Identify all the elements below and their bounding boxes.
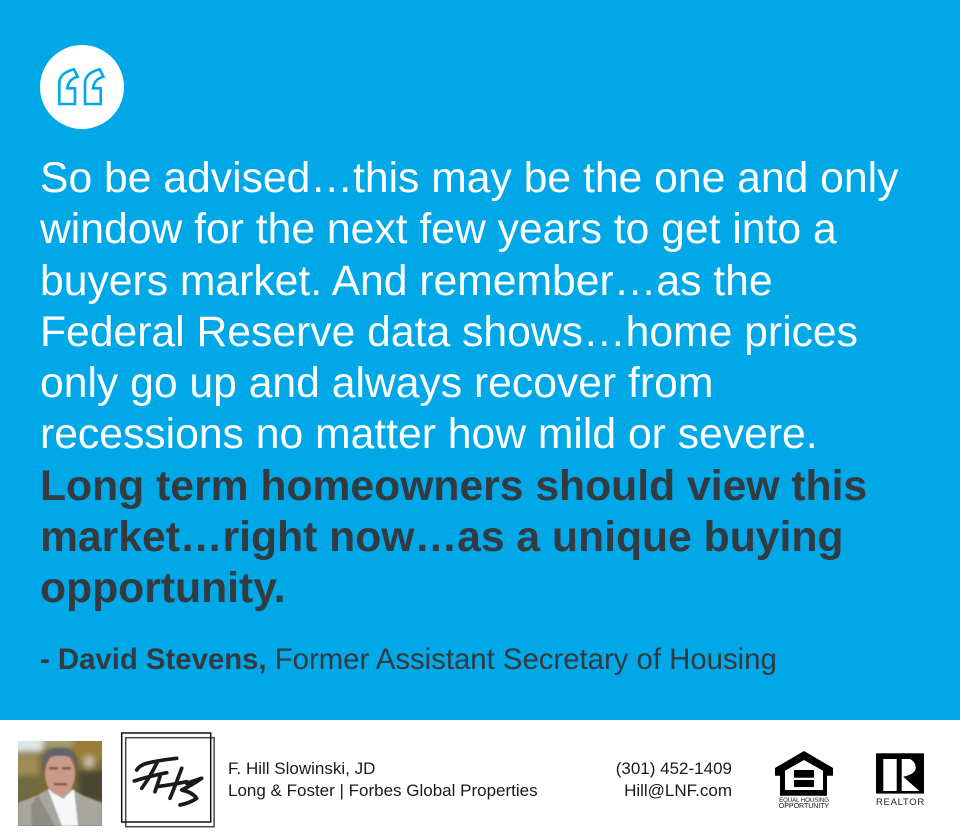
icon: quotation mark badge xyxy=(40,45,124,129)
panel: contact footer xyxy=(18,732,924,828)
quote text: opportunity. xyxy=(40,564,286,612)
agent name and company: Long & Foster | Forbes Global Properties xyxy=(228,781,538,800)
icon: equal housing opportunity: OPPORTUNITY xyxy=(779,803,829,810)
quote text: market…right now…as a unique buying xyxy=(40,513,843,561)
quote text: window for the next few years to get into a xyxy=(40,205,837,253)
agent name and company xyxy=(228,759,538,800)
quote text: buyers market. And remember…as the xyxy=(40,257,773,305)
quote text: Federal Reserve data shows…home prices xyxy=(40,308,858,356)
icon: equal housing opportunity: EQUAL HOUSING xyxy=(779,798,829,804)
contact details xyxy=(616,759,732,800)
attribution: - David Stevens, Former Assistant Secretary of Housing xyxy=(40,643,777,676)
photo: agent portrait xyxy=(18,741,102,826)
quote text: recessions no matter how mild or severe. xyxy=(40,410,818,458)
quote text: So be advised…this may be the one and only xyxy=(40,154,898,202)
icon: equal housing opportunity xyxy=(775,751,833,810)
contact details: Hill@LNF.com xyxy=(624,781,732,800)
contact details: (301) 452-1409 xyxy=(616,759,732,778)
quote text xyxy=(40,154,898,612)
quote text: Long term homeowners should view this xyxy=(40,462,867,510)
icon: realtor mark xyxy=(876,753,925,808)
agent name and company: F. Hill Slowinski, JD xyxy=(228,759,375,778)
logo: FHS monogram xyxy=(120,732,215,828)
quote text: only go up and always recover from xyxy=(40,359,713,407)
icon: realtor mark: REALTOR xyxy=(876,797,925,808)
